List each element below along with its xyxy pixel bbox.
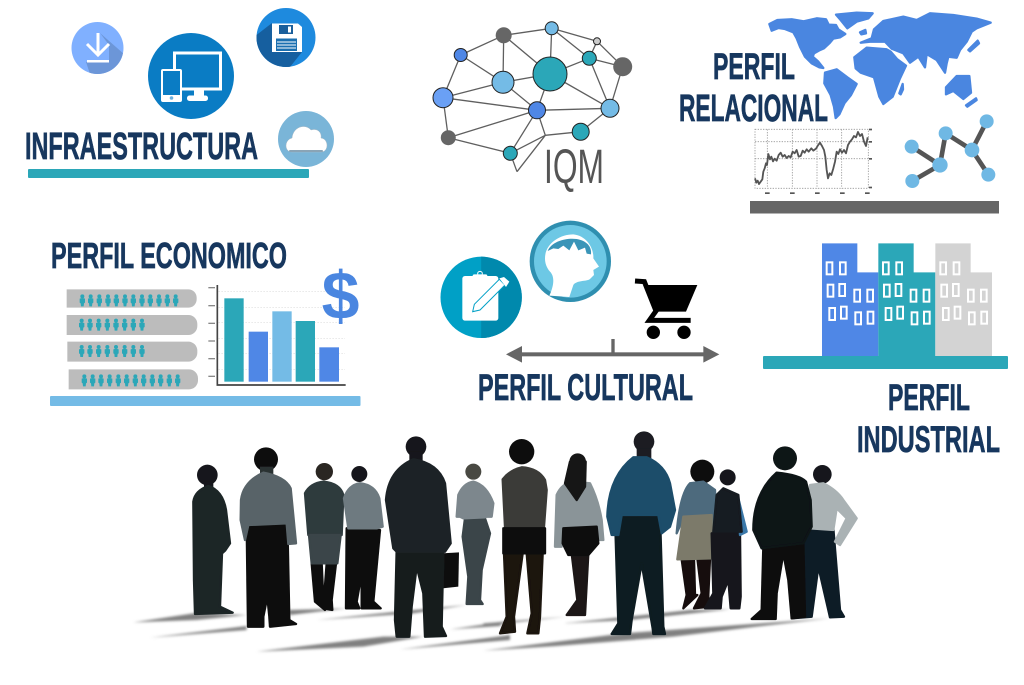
people right group: [500, 431, 857, 634]
network edges: [443, 28, 623, 172]
shadows: [133, 605, 830, 652]
panel: perfil industrial: [763, 243, 1008, 460]
people left group: [193, 436, 493, 637]
icon: monitor and phone: [148, 33, 234, 119]
world map: [769, 13, 991, 118]
heading: perfil relacional: PERFIL: [713, 46, 795, 87]
arrow: double-headed scale: [506, 339, 719, 363]
base bar: [750, 201, 999, 214]
heading: perfil industrial: PERFIL: [888, 377, 970, 418]
icon: dollar sign: $: [322, 258, 359, 334]
people rows chart: [67, 289, 198, 389]
heading: perfil cultural: PERFIL CULTURAL: [478, 367, 693, 408]
panel: perfil cultural: [440, 221, 719, 408]
heading: infraestructura: INFRAESTRUCTURA: [25, 126, 258, 168]
base bar: [763, 356, 1008, 369]
line chart: [755, 129, 872, 194]
panel: infraestructura: [25, 8, 334, 178]
bar chart: [208, 285, 346, 385]
panel: perfil relacional: RELACIONAL: [679, 88, 828, 130]
underline bar: [28, 169, 309, 178]
icon: shopping cart: [635, 281, 697, 339]
buildings: [822, 243, 992, 356]
icon: download: [72, 22, 124, 74]
panel: perfil economico: [50, 235, 360, 406]
icon: floppy disk: [256, 8, 316, 67]
panel: IQM brain network: [433, 22, 632, 194]
network nodes: [433, 22, 632, 160]
panel: perfil relacional: [679, 13, 999, 214]
icon: head with city skyline: [530, 221, 611, 302]
icon: cloud: [278, 111, 334, 167]
heading: perfil economico: PERFIL ECONOMICO: [51, 235, 287, 276]
illustration: crowd of people looking up: [133, 431, 857, 652]
underline bar: [50, 396, 360, 406]
icon: molecule network: [905, 114, 995, 188]
label: IQM: IQM: [544, 141, 604, 194]
icon: clipboard and pencil: [440, 255, 524, 340]
